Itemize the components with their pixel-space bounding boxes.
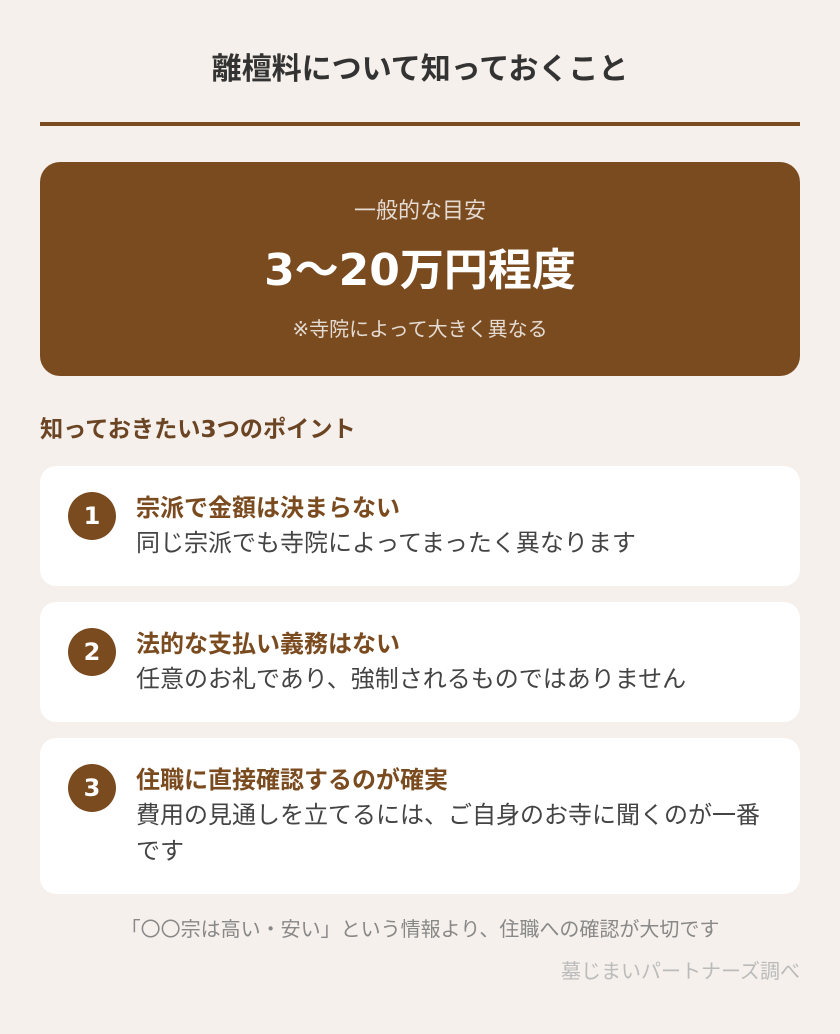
- source credit: 墓じまいパートナーズ調べ: [561, 959, 800, 983]
- number badge 1: [68, 492, 116, 540]
- point 2 title: 法的な支払い義務はない: [136, 630, 400, 658]
- point 3 title: 住職に直接確認するのが確実: [136, 766, 448, 794]
- estimate amount: 3〜20万円程度: [264, 245, 576, 296]
- number badge 3: 3: [84, 774, 100, 802]
- section heading: 知っておきたい3つのポイント: [40, 416, 356, 443]
- number badge 2: [68, 628, 116, 676]
- point 2 description: 任意のお礼であり、強制されるものではありません: [136, 665, 686, 693]
- estimate label: 一般的な目安: [354, 199, 486, 224]
- footer note: 「〇〇宗は高い・安い」という情報より、住職への確認が大切です: [121, 917, 719, 941]
- point 1 title: 宗派で金額は決まらない: [136, 494, 400, 522]
- point 3 description: 費用の見通しを立てるには、ご自身のお寺に聞くのが一番です: [136, 801, 760, 865]
- title rule: [40, 122, 800, 126]
- number badge 2: 2: [84, 638, 100, 666]
- number badge 1: 1: [84, 502, 100, 530]
- title: 離檀料について知っておくこと: [212, 52, 628, 87]
- panel: general estimate: [40, 162, 800, 376]
- number badge 3: [68, 764, 116, 812]
- panel: point 1: [40, 466, 800, 586]
- estimate note: ※寺院によって大きく異なる: [292, 317, 548, 341]
- panel: point 3: [40, 738, 800, 894]
- point 1 description: 同じ宗派でも寺院によってまったく異なります: [136, 529, 636, 557]
- panel: point 2: [40, 602, 800, 722]
